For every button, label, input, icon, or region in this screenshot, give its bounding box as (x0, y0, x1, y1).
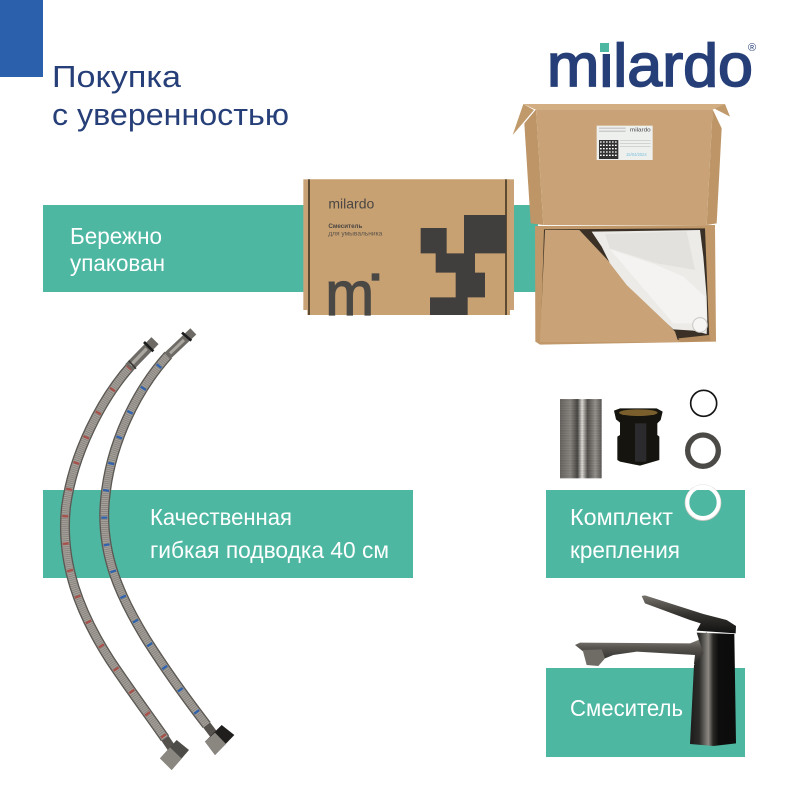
title: Покупка (52, 59, 182, 94)
panel: mounting kit band: крепления (570, 537, 680, 563)
box product text (328, 223, 383, 238)
panel: flexible hose band (43, 490, 413, 578)
box product text: для умывальника (328, 231, 383, 238)
lid inside (536, 109, 713, 225)
panel: mounting kit band (546, 490, 745, 578)
title (52, 59, 289, 132)
faucet spout (575, 632, 710, 667)
panel: flexible hose band: гибкая подводка 40 см (150, 537, 389, 563)
fitting (167, 331, 193, 356)
box logo text: milardo (328, 196, 375, 212)
fitting (129, 341, 155, 367)
thin o-ring (691, 390, 717, 416)
panel: carefully packed band: Бережно (70, 223, 162, 249)
faucet handle (642, 595, 736, 633)
brand logo: ® (748, 42, 756, 54)
warranty label (597, 126, 653, 160)
corner accent block (0, 0, 43, 77)
panel: carefully packed band (43, 205, 538, 292)
box product text: Смеситель (328, 223, 362, 230)
white ring (687, 486, 719, 519)
dark washer (688, 435, 718, 466)
warranty label: 15/04/2024 (626, 152, 647, 157)
black nut (614, 408, 663, 466)
faucet (575, 595, 736, 746)
mounting parts (560, 390, 719, 519)
panel: faucet band (546, 668, 745, 757)
box graphic blocks (421, 215, 506, 315)
flexible hoses (65, 331, 234, 770)
open cardboard box (513, 104, 730, 345)
title: с уверенностью (52, 97, 289, 132)
cardboard insert (540, 230, 678, 342)
nut (160, 740, 189, 770)
panel: faucet band: Смеситель (570, 695, 683, 721)
closed cardboard box (303, 179, 514, 329)
faucet body (690, 633, 736, 746)
nut (205, 725, 234, 755)
hose: blue (104, 331, 234, 755)
panel: flexible hose band: Качественная (150, 504, 292, 530)
lid flaps (513, 104, 730, 225)
brand logo: milardo (547, 32, 753, 99)
white tissue wrap (592, 230, 707, 334)
box monogram: m (325, 260, 374, 329)
box base (535, 225, 716, 345)
hose: red (65, 341, 189, 770)
panel: mounting kit band: Комплект (570, 504, 673, 530)
threaded tube (560, 399, 602, 478)
panel: carefully packed band: упакован (70, 250, 165, 276)
warranty label: milardo (630, 127, 651, 133)
